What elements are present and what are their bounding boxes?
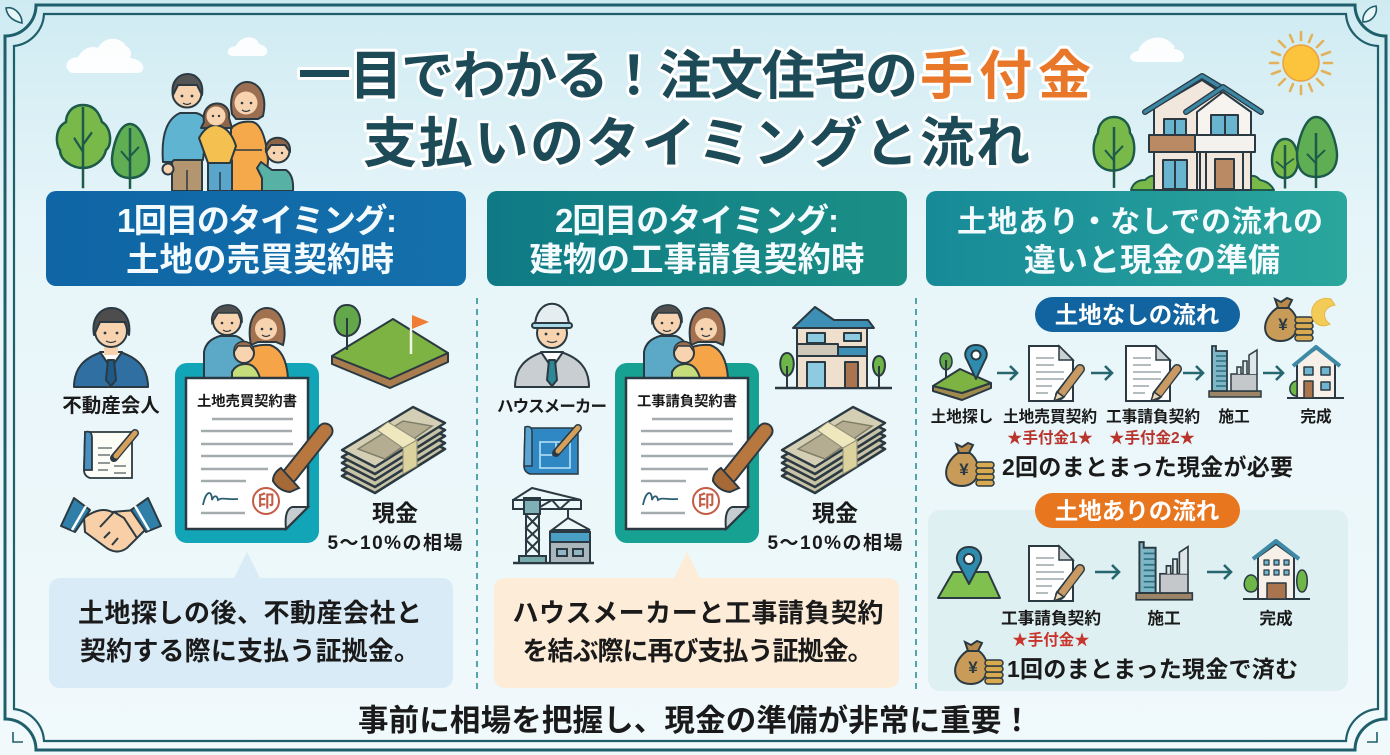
flow labels: 施工 [1147, 609, 1181, 628]
panel: first timing [46, 191, 466, 688]
icon: land plot [332, 305, 448, 388]
pill: no land flow [1035, 297, 1240, 332]
callout: first timing [49, 552, 453, 688]
heading: flow differences [926, 191, 1347, 286]
flow labels: 完成 [1300, 407, 1332, 426]
contract clipboard: 印 [698, 491, 714, 511]
contract clipboard [615, 305, 765, 543]
icon: construction contract [1029, 546, 1080, 601]
pill: no land flow: 土地なしの流れ [1055, 302, 1219, 328]
icon: contract document [84, 432, 135, 478]
arrow [997, 366, 1017, 380]
arrow [1095, 565, 1119, 579]
flow labels: 工事請負契約 [1106, 407, 1200, 426]
heading: first timing: 1回目のタイミング: [117, 202, 397, 239]
arrow [1183, 366, 1203, 380]
flow labels [931, 407, 1332, 426]
deposit markers [1007, 428, 1195, 447]
title: 支払いのタイミングと流れ [363, 114, 1030, 174]
icon: construction contract [1126, 346, 1177, 401]
flow labels: 施工 [1218, 408, 1250, 426]
icon: completed house [1287, 347, 1344, 398]
contract clipboard: 工事請負契約書 [637, 392, 737, 410]
icon: completed building [1243, 541, 1310, 599]
clouds [66, 37, 1184, 73]
flow labels: 完成 [1259, 608, 1293, 628]
illustration: left trees [57, 105, 149, 189]
icon: finished house [775, 307, 892, 388]
summary: two cash payments [946, 443, 1293, 486]
flow labels: 工事請負契約 [1001, 609, 1101, 628]
dashed dividers [477, 298, 916, 690]
illustration: sun [1270, 32, 1332, 94]
arrow [1091, 366, 1112, 380]
label: cash amount: 5～10%の相場 [328, 532, 462, 554]
heading: flow differences: 土地あり・なしでの流れの [957, 206, 1323, 239]
contract clipboard: 土地売買契約書 [197, 392, 297, 410]
callout: second timing: を結ぶ際に再び支払う証拠金。 [522, 636, 874, 666]
illustration: house and right trees [1094, 76, 1337, 190]
label: cash amount [328, 500, 462, 554]
panel: with land flow [928, 493, 1348, 691]
label: house maker: ハウスメーカー [497, 397, 607, 416]
callout: first timing: 契約する際に支払う証拠金。 [80, 636, 420, 666]
contract clipboard [175, 305, 325, 543]
heading: flow differences: 違いと現金の準備 [1024, 242, 1280, 278]
callout: second timing [494, 552, 899, 688]
icon: cash stack [342, 407, 445, 493]
arrow [1263, 366, 1283, 380]
flow labels: 土地売買契約 [1003, 407, 1097, 426]
panel: second timing [487, 191, 907, 688]
icon: land contract [1029, 346, 1080, 401]
label: cash amount [768, 500, 902, 554]
title: 一目でわかる！注文住宅の [298, 47, 918, 106]
title: 手付金 [920, 47, 1091, 106]
callout: second timing: ハウスメーカーと工事請負契約 [512, 598, 884, 628]
icon: real estate agent [74, 308, 148, 387]
icon: land search [933, 345, 991, 400]
label: cash amount: 現金 [812, 500, 858, 526]
flow labels [1001, 608, 1293, 628]
icon: handshake [61, 498, 161, 552]
icon: construction [1136, 542, 1192, 600]
heading: second timing [487, 191, 907, 286]
icon: map pin on land [938, 547, 1000, 598]
deposit markers: ★手付金2★ [1109, 428, 1195, 447]
summary: two cash payments: 2回のまとまった現金が必要 [1002, 454, 1293, 480]
deposit marker: ★手付金★ [1012, 630, 1090, 649]
flow: no land [931, 345, 1344, 447]
icon: cash stack [782, 407, 885, 493]
icon: site worker [515, 304, 589, 387]
callout: first timing: 土地探しの後、不動産会社と [78, 598, 422, 628]
panel: land and cash flow [926, 191, 1348, 691]
arrow [1207, 565, 1231, 579]
label: cash amount: 5～10%の相場 [768, 532, 902, 554]
icon: money bag and moon coin [1265, 298, 1335, 341]
deposit markers: ★手付金1★ [1007, 428, 1093, 447]
title [298, 47, 1091, 174]
summary: one cash payment: 1回のまとまった現金で済む [1007, 656, 1298, 682]
illustration: family [162, 74, 293, 191]
label: cash amount: 現金 [372, 500, 418, 526]
contract clipboard: 印 [258, 491, 274, 511]
icon: construction [1209, 346, 1261, 397]
heading: first timing [46, 191, 466, 286]
pill: with land flow: 土地ありの流れ [1055, 498, 1219, 524]
heading: first timing: 土地の売買契約時 [126, 242, 394, 279]
flow labels: 土地探し [931, 408, 993, 426]
footer message: 事前に相場を把握し、現金の準備が非常に重要！ [358, 703, 1032, 738]
icon: blueprint [524, 427, 578, 474]
icon: tower crane [512, 488, 594, 563]
heading: second timing: 2回目のタイミング: [555, 202, 839, 239]
pill: with land flow [1035, 493, 1240, 528]
label: real estate agent: 不動産会人 [62, 395, 160, 417]
heading: second timing: 建物の工事請負契約時 [530, 242, 864, 279]
summary: one cash payment [955, 641, 1298, 684]
